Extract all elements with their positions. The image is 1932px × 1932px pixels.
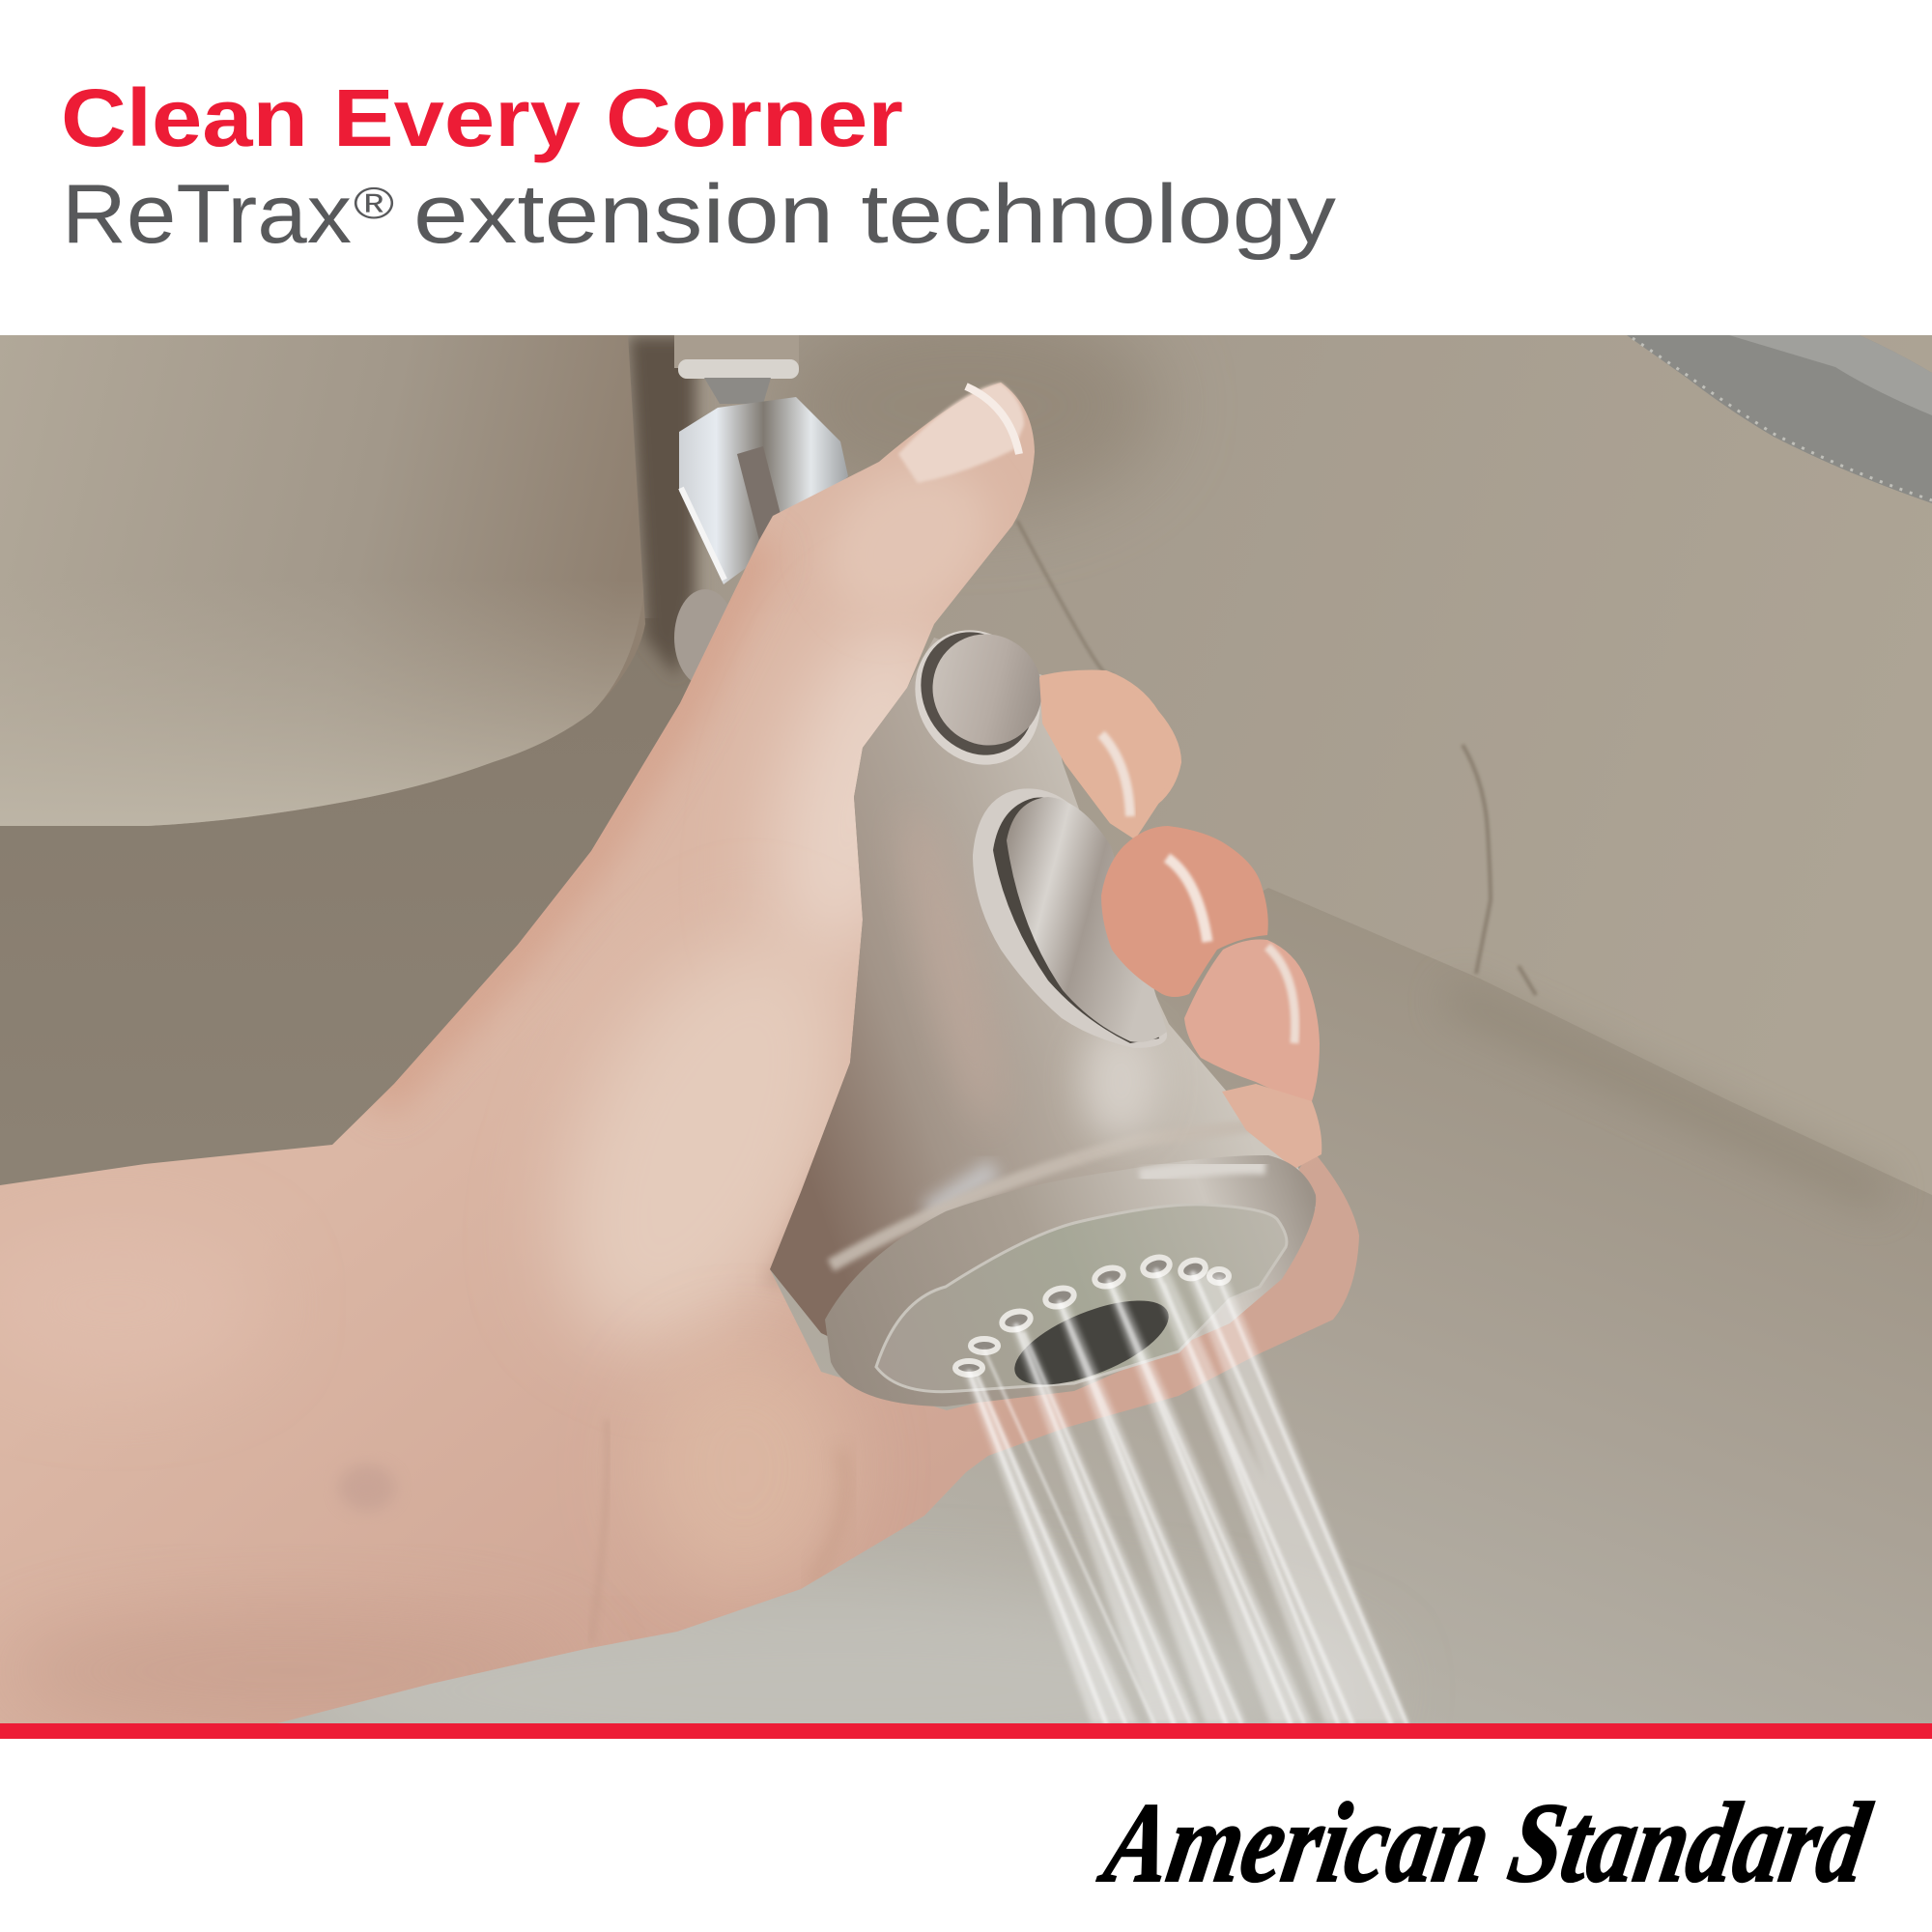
subheading: ReTrax extension technology: extension technology <box>413 168 1336 261</box>
lower light area <box>355 1601 1320 1723</box>
chrome faucet neck <box>674 335 848 686</box>
cream basin <box>0 335 645 775</box>
ledge shadow along corner <box>1816 1172 1839 1182</box>
center dark aerator <box>1004 1283 1179 1403</box>
spray face <box>876 1205 1287 1392</box>
ledge below wall <box>278 888 1932 1723</box>
rim highlight <box>1140 1166 1265 1177</box>
background wall <box>628 335 1932 1195</box>
braided hose <box>1627 335 1932 503</box>
small round button <box>915 630 1041 765</box>
dark gap behind basin <box>628 335 696 676</box>
basin lower light band <box>0 621 639 826</box>
arm and palm <box>0 328 1401 1729</box>
ring finger <box>1184 939 1320 1101</box>
index finger <box>1042 673 1179 836</box>
photo: hand holding faucet spray head <box>0 299 1932 1787</box>
spray head rim <box>825 1155 1316 1406</box>
subheading: ReTrax extension technology <box>62 168 1336 261</box>
skin shading <box>0 436 1018 1729</box>
heading: Clean Every Corner: Clean Every Corner <box>61 72 903 163</box>
red divider bar <box>0 1723 1932 1739</box>
subheading: ReTrax extension technology: ® <box>354 178 394 228</box>
fingers <box>1042 673 1321 1169</box>
nozzles <box>955 1255 1229 1375</box>
little finger <box>1222 1084 1321 1169</box>
water streams <box>964 1270 1408 1723</box>
body reflections <box>831 800 1256 1265</box>
wall shading near faucet <box>779 335 1159 512</box>
middle finger <box>1101 826 1268 997</box>
countertop <box>0 618 692 1185</box>
spray head body <box>770 638 1316 1401</box>
subheading: ReTrax extension technology: ReTrax <box>62 168 352 261</box>
thumb nail <box>898 383 1024 483</box>
marble veins <box>1017 521 1536 995</box>
long oval button <box>973 788 1167 1048</box>
